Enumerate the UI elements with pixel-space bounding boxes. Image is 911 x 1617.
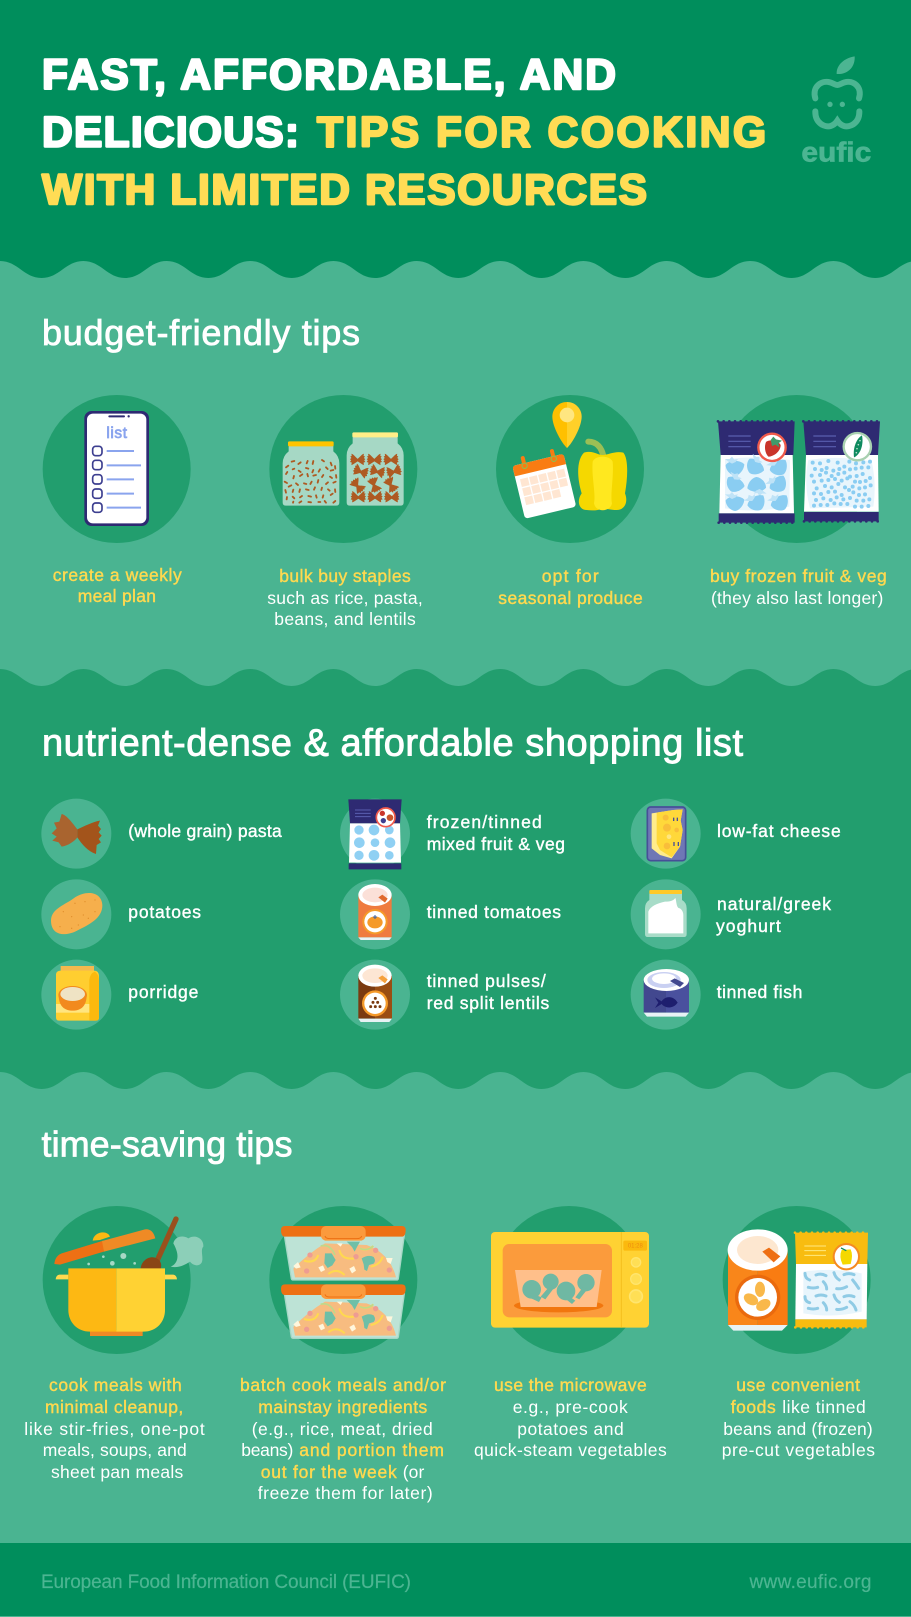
tip: frozen fruit and veg <box>710 395 887 608</box>
panel: time-saving tips <box>0 1072 911 1545</box>
heading: time-saving tips: time-saving tips <box>42 1124 292 1165</box>
tip text <box>474 1375 667 1460</box>
icon: porridge box <box>41 960 111 1030</box>
icon: jars of staples <box>269 395 417 543</box>
tip: seasonal produce <box>496 395 644 608</box>
tip text: use the microwave <box>494 1375 647 1395</box>
tip text: like stir-fries, one-pot <box>24 1419 205 1439</box>
tip text: beans) <box>241 1440 293 1460</box>
eufic logo: eufic <box>801 137 871 168</box>
icon: bean tin and vegetable bag <box>723 1206 871 1354</box>
icon: tomato tin <box>340 879 410 949</box>
label: tinned tomatoes <box>427 902 561 922</box>
tip text: e.g., pre-cook <box>513 1397 628 1417</box>
panel: nutrient-dense shopping list <box>0 669 911 1100</box>
label: low-fat cheese <box>717 821 841 841</box>
title: FAST, AFFORDABLE, AND <box>42 52 616 99</box>
tip text: buy frozen fruit & veg <box>710 566 887 586</box>
tip text: pre-cut vegetables <box>722 1440 875 1460</box>
label: (whole grain) pasta <box>128 821 282 841</box>
tip text <box>53 565 182 606</box>
heading: budget-friendly tips: budget-friendly tips <box>42 312 360 353</box>
icon: pasta <box>41 799 111 869</box>
tip text: batch cook meals and/or <box>240 1375 446 1395</box>
tip text: seasonal produce <box>498 588 643 608</box>
tip text: cook meals with <box>49 1375 182 1395</box>
label: porridge <box>128 982 198 1002</box>
label: tinned fish <box>717 982 802 1002</box>
icon: cheese tray <box>631 799 701 869</box>
tip text <box>240 1375 446 1503</box>
icon: potato <box>41 879 111 949</box>
label: tinned pulses/ <box>427 971 546 991</box>
label: yoghurt <box>716 916 781 936</box>
label <box>427 812 565 854</box>
list item: potatoes <box>41 879 201 949</box>
tip text <box>722 1375 875 1460</box>
label: natural/greek <box>717 894 831 914</box>
tip text: create a weekly <box>53 565 182 585</box>
tip text: sheet pan meals <box>51 1462 184 1482</box>
tip text: use convenient <box>736 1375 860 1395</box>
icon: phone with list: list <box>106 425 128 442</box>
tip: bulk buy staples <box>267 395 423 629</box>
tip text: freeze them for later) <box>258 1483 433 1503</box>
eufic logo <box>801 56 871 168</box>
list item: low-fat cheese <box>631 799 841 869</box>
tip text <box>498 566 643 608</box>
icon: phone with list <box>43 395 191 543</box>
icon: yoghurt jar <box>631 879 701 949</box>
tip text: bulk buy staples <box>279 566 411 586</box>
icon: cooking pot <box>43 1206 203 1354</box>
tip text <box>24 1375 205 1482</box>
icon: frozen bag <box>340 799 410 869</box>
icon: frozen bags <box>718 395 880 543</box>
heading: shopping list: nutrient-dense & affordable shopping list <box>42 723 743 765</box>
list item: frozen mixed fruit and veg <box>340 799 565 869</box>
list item: whole grain pasta <box>41 799 282 869</box>
tip text: foods <box>731 1397 776 1417</box>
tip text <box>267 566 423 629</box>
label <box>427 971 550 1013</box>
tip text: beans, and lentils <box>274 609 416 629</box>
tip text: and portion them <box>299 1440 444 1460</box>
tip text <box>710 566 887 608</box>
tip text: beans and (frozen) <box>723 1419 873 1439</box>
tip text: potatoes and <box>517 1419 624 1439</box>
tip text: quick-steam vegetables <box>474 1440 667 1460</box>
list item: tinned tomatoes <box>340 879 561 949</box>
header panel <box>0 0 911 290</box>
label: mixed fruit & veg <box>427 834 565 854</box>
tip text: like tinned <box>782 1397 866 1417</box>
icon: pin, calendar and pepper <box>496 395 644 543</box>
tip text: meals, soups, and <box>43 1440 187 1460</box>
tip: minimal cleanup meals <box>24 1206 205 1482</box>
label: potatoes <box>128 902 201 922</box>
title: DELICIOUS: <box>42 110 299 156</box>
list item: natural greek yoghurt <box>631 879 831 949</box>
tip: convenient foods <box>722 1206 875 1460</box>
list item: porridge <box>41 960 198 1030</box>
icon: microwave: 01:28 <box>628 1244 643 1250</box>
footer <box>0 1543 911 1617</box>
title: WITH LIMITED RESOURCES <box>42 167 647 214</box>
tip text: meal plan <box>78 586 156 606</box>
tip text: opt for <box>542 566 599 586</box>
tip text: (e.g., rice, meat, dried <box>252 1419 433 1439</box>
icon: pulses tin <box>340 960 410 1030</box>
label <box>716 894 831 936</box>
tip text: mainstay ingredients <box>258 1397 428 1417</box>
icon: stacked containers <box>269 1206 417 1354</box>
icon: microwave <box>491 1206 649 1354</box>
label: red split lentils <box>427 993 550 1013</box>
footer website: www.eufic.org <box>748 1572 872 1593</box>
title: TIPS FOR COOKING <box>317 110 766 156</box>
tip: weekly meal plan <box>43 395 191 606</box>
tip text: (they also last longer) <box>711 588 883 608</box>
tip text: (or <box>403 1462 424 1482</box>
tip text: such as rice, pasta, <box>267 588 423 608</box>
list item: tinned pulses and lentils <box>340 960 550 1030</box>
tip text: out for the week <box>261 1462 397 1482</box>
title <box>42 52 766 214</box>
tip text: minimal cleanup, <box>45 1397 183 1417</box>
tip: batch cooking <box>240 1206 446 1503</box>
tip: use the microwave <box>474 1206 667 1460</box>
icon: fish tin <box>631 960 701 1030</box>
footer organisation name: European Food Information Council (EUFIC) <box>41 1572 411 1593</box>
panel: budget-friendly tips <box>0 261 911 700</box>
label: frozen/tinned <box>427 812 542 832</box>
list item: tinned fish <box>631 960 802 1030</box>
